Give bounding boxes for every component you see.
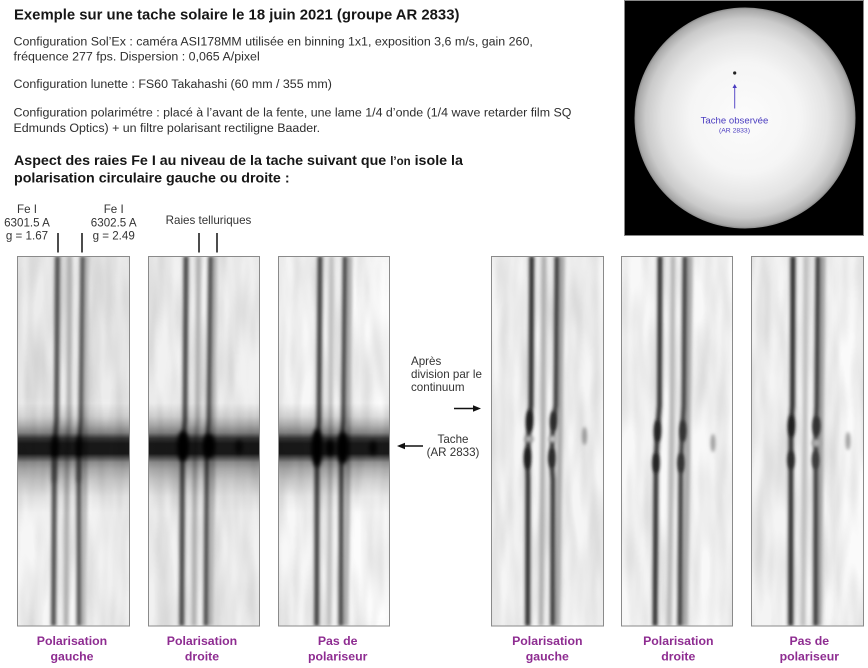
caption: right polarisation, corrected	[643, 634, 713, 664]
label: observed sunspot: (AR 2833)	[719, 128, 750, 135]
caption: right polarisation, raw: droite	[185, 650, 219, 664]
title: Exemple sur une tache solaire le 18 juin 2021 (groupe AR 2833)	[14, 8, 459, 24]
caption: left polarisation, corrected	[512, 634, 582, 664]
label: Fe I 6301.5: 6301.5 A	[4, 216, 50, 230]
label: observed sunspot: Tache observée	[701, 116, 768, 126]
text block: Sol'Ex configuration: Configuration Sol’Ex : caméra ASI178MM utilisée en binning 1x1, exposition 3,6 m/s, gain 260,	[14, 34, 533, 48]
text block: Sol'Ex configuration	[14, 34, 533, 64]
label: after division by continuum	[411, 355, 482, 394]
label: spot: Tache	[438, 433, 468, 446]
section heading: polarisation circulaire gauche ou droite :	[14, 170, 290, 186]
panel: corrected spectrum, left polarisation	[491, 256, 604, 626]
caption: right polarisation, raw: Polarisation	[167, 634, 237, 648]
caption: right polarisation, raw	[167, 634, 237, 664]
arrow: spot pointer	[397, 443, 423, 449]
caption: no polariser, corrected: polariseur	[780, 650, 839, 664]
panel: raw spectrum, left polarisation	[18, 257, 129, 626]
label: after division by continuum: Après	[411, 355, 441, 368]
label: Fe I 6301.5	[4, 203, 50, 242]
marker: telluric tick left	[198, 233, 200, 252]
caption: no polariser, corrected: Pas de	[789, 634, 829, 648]
caption: left polarisation, raw: Polarisation	[37, 634, 107, 648]
panel: corrected spectrum, no polariser	[751, 250, 868, 630]
panel: raw spectrum, right polarisation	[148, 256, 260, 626]
section heading: Aspect des raies Fe I au niveau de la tache suivant que l’on isole la	[14, 153, 464, 169]
label: after division by continuum: division par le	[411, 368, 482, 381]
label: after division by continuum: continuum	[411, 381, 464, 394]
label: Fe I 6302.5	[91, 203, 137, 242]
caption: no polariser, raw	[308, 634, 368, 664]
caption: left polarisation, corrected: Polarisation	[512, 634, 582, 648]
caption: no polariser, raw: Pas de	[318, 634, 358, 648]
label: Fe I 6301.5: g = 1.67	[6, 230, 48, 242]
label: Fe I 6302.5: 6302.5 A	[91, 216, 137, 230]
label: Fe I 6302.5: Fe I	[104, 203, 124, 216]
panel: raw spectrum, no polariser	[279, 257, 389, 626]
text block: polarimeter configuration: Edmunds Optics) + un filtre polarisant rectiligne Baader.	[14, 121, 320, 135]
marker: Fe I line tick left	[57, 233, 59, 252]
caption: right polarisation, corrected: Polarisation	[643, 634, 713, 648]
label: spot: (AR 2833)	[427, 446, 480, 459]
label: spot	[427, 433, 480, 459]
text block: polarimeter configuration	[14, 106, 572, 135]
label: Fe I 6301.5: Fe I	[17, 203, 37, 216]
caption: no polariser, corrected	[780, 634, 839, 664]
panel: corrected spectrum, right polarisation	[621, 256, 733, 626]
label: observed sunspot	[701, 116, 768, 135]
text block: polarimeter configuration: Configuration polarimétre : placé à l’avant de la fente, une lame 1/4 d’onde (1/4 wave retarder film SQ	[14, 106, 572, 120]
label: telluric lines: Raies telluriques	[166, 214, 252, 227]
caption: left polarisation, raw	[37, 634, 107, 664]
text block: telescope configuration: Configuration lunette : FS60 Takahashi (60 mm / 355 mm)	[14, 77, 332, 91]
caption: left polarisation, corrected: gauche	[526, 650, 569, 664]
arrow: continuum division	[454, 405, 481, 412]
caption: no polariser, raw: polariseur	[308, 650, 368, 664]
caption: right polarisation, corrected: droite	[661, 650, 696, 664]
marker: Fe I line tick right	[81, 233, 83, 252]
label: Fe I 6302.5: g = 2.49	[93, 230, 135, 242]
arrow: to sunspot	[732, 84, 737, 108]
marker: telluric tick right	[216, 233, 218, 252]
panel: solar disc image	[624, 0, 864, 236]
section heading	[14, 153, 464, 186]
icon: sunspot	[733, 71, 736, 75]
caption: left polarisation, raw: gauche	[50, 650, 94, 664]
text block: Sol'Ex configuration: fréquence 277 fps. Dispersion : 0,065 A/pixel	[14, 50, 260, 64]
